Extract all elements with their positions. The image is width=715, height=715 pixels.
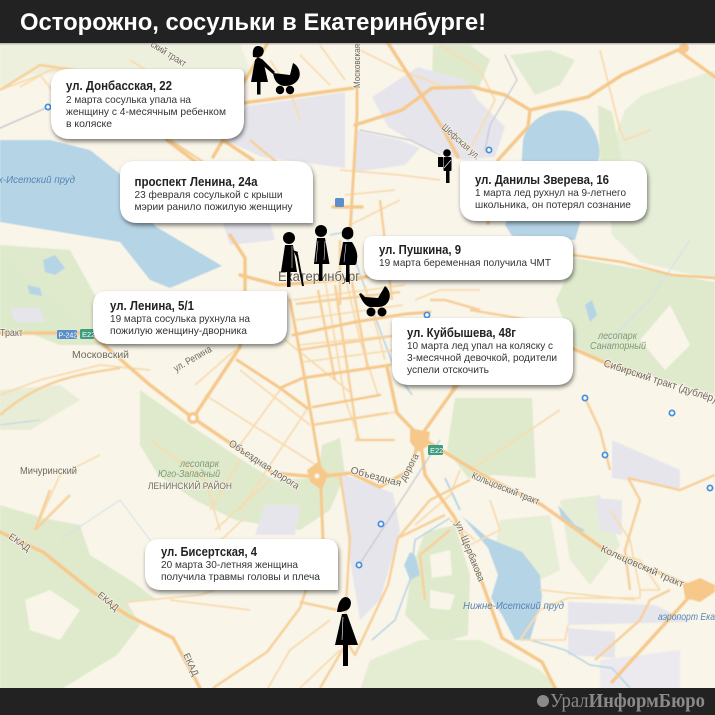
road shields: E22: [430, 446, 443, 455]
map place labels: ул. Репина: [172, 344, 214, 375]
callout: Бисертская: получила травмы головы и плеча: [161, 571, 320, 583]
map place labels: ул. Щербакова: [452, 520, 487, 584]
map place labels: Екатеринбург: [278, 269, 360, 284]
rivers: [0, 232, 690, 688]
callout: Куйбышева: 3-месячной девочкой, родители: [407, 352, 557, 364]
icon: pregnant woman: [339, 227, 357, 282]
icon: mother with stroller: [251, 46, 300, 94]
callout: Данилы Зверева: школьника, он потерял сознание: [475, 199, 631, 211]
callout: Пушкина: [364, 236, 573, 280]
icon: baby stroller: [359, 286, 390, 316]
title bar: [0, 0, 715, 44]
water bodies: [0, 110, 599, 640]
map place labels: Кольцовский тракт: [599, 544, 686, 591]
callout: Бисертская: [145, 539, 338, 590]
map place labels: Тракт: [0, 328, 23, 339]
callout: Бисертская: 20 марта 30-летняя женщина: [161, 559, 298, 571]
callout: Куйбышева: [392, 318, 573, 385]
callout: Ленина 5/1: пожилую женщину-дворника: [110, 325, 247, 337]
road shields: [57, 198, 443, 455]
map place labels: Мичуринский: [20, 466, 77, 477]
callout: Донбасская: в коляске: [66, 118, 112, 130]
callout: Донбасская: 2 марта сосулька упала на: [66, 94, 191, 106]
callout: Донбасская: [51, 69, 244, 139]
road shields: Р-242: [58, 332, 77, 340]
callout: Данилы Зверева: 1 марта лед рухнул на 9-летнего: [475, 187, 626, 199]
map place labels: Санаторный: [590, 340, 646, 352]
title: Осторожно, сосульки в Екатеринбурге!: [20, 9, 486, 36]
callout: Данилы Зверева: ул. Данилы Зверева, 16: [475, 172, 609, 187]
callout: Данилы Зверева: [460, 161, 647, 221]
callout: Ленина 5/1: ул. Ленина, 5/1: [110, 298, 194, 313]
map place labels: х-Исетский пруд: [0, 174, 75, 186]
map place labels: лесопарк: [179, 459, 220, 470]
callout: Ленина 5/1: [93, 291, 287, 344]
callout: Пушкина: ул. Пушкина, 9: [379, 242, 461, 257]
map place labels: лесопарк: [597, 330, 638, 342]
watermark logo: УралИнформБюро: [550, 690, 705, 712]
map place labels: ЕКАД: [95, 590, 121, 614]
map place labels: Юго-Западный: [158, 469, 220, 480]
map place labels: ский тракт: [148, 39, 188, 70]
icon: young woman: [335, 597, 358, 666]
icon: elderly woman with cane: [281, 232, 304, 287]
callout: Донбасская: ул. Донбасская, 22: [66, 78, 172, 93]
callout: Куйбышева: ул. Куйбышева, 48г: [407, 325, 517, 340]
icon: schoolboy with backpack: [438, 149, 452, 183]
map place labels: Объездная дорога: [226, 437, 302, 492]
callout: Куйбышева: 10 марта лед упал на коляску с: [407, 340, 553, 352]
callout: Куйбышева: успели отскочить: [407, 364, 490, 376]
footer bar: [0, 688, 715, 715]
transit markers: [45, 104, 713, 568]
map place labels: Московская: [352, 44, 362, 88]
callout: проспект Ленина: мэрии ранило пожилую женщину: [134, 201, 293, 213]
callout: проспект Ленина: проспект Ленина, 24а: [134, 174, 258, 189]
callout: проспект Ленина: 23 февраля сосулькой с крыши: [134, 189, 283, 201]
light clearings: [25, 305, 690, 640]
map place labels: Московский: [72, 349, 129, 361]
map place labels: Кольцовский тракт: [470, 471, 541, 508]
callout: проспект Ленина: [120, 161, 313, 223]
map place labels: дорога: [398, 451, 422, 483]
map place labels: ЛЕНИНСКИЙ РАЙОН: [148, 480, 232, 492]
callout: Бисертская: ул. Бисертская, 4: [161, 544, 258, 559]
map place labels: Шефская ул.: [439, 121, 483, 162]
map place labels: Объездная: [349, 464, 403, 489]
callout: Ленина 5/1: 19 марта сосулька рухнула на: [110, 313, 250, 325]
map place labels: ЕКАД: [6, 531, 33, 555]
map place labels: Нижне-Исетский пруд: [463, 600, 564, 612]
interchanges: [187, 43, 715, 602]
map place labels: ЕКАД: [180, 652, 201, 679]
road shields: E22: [82, 330, 95, 339]
icon: woman: [314, 225, 330, 281]
callout: Донбасская: женщину с 4-месячным ребенком: [66, 106, 226, 118]
callout: Пушкина: 19 марта беременная получила ЧМТ: [379, 257, 552, 269]
